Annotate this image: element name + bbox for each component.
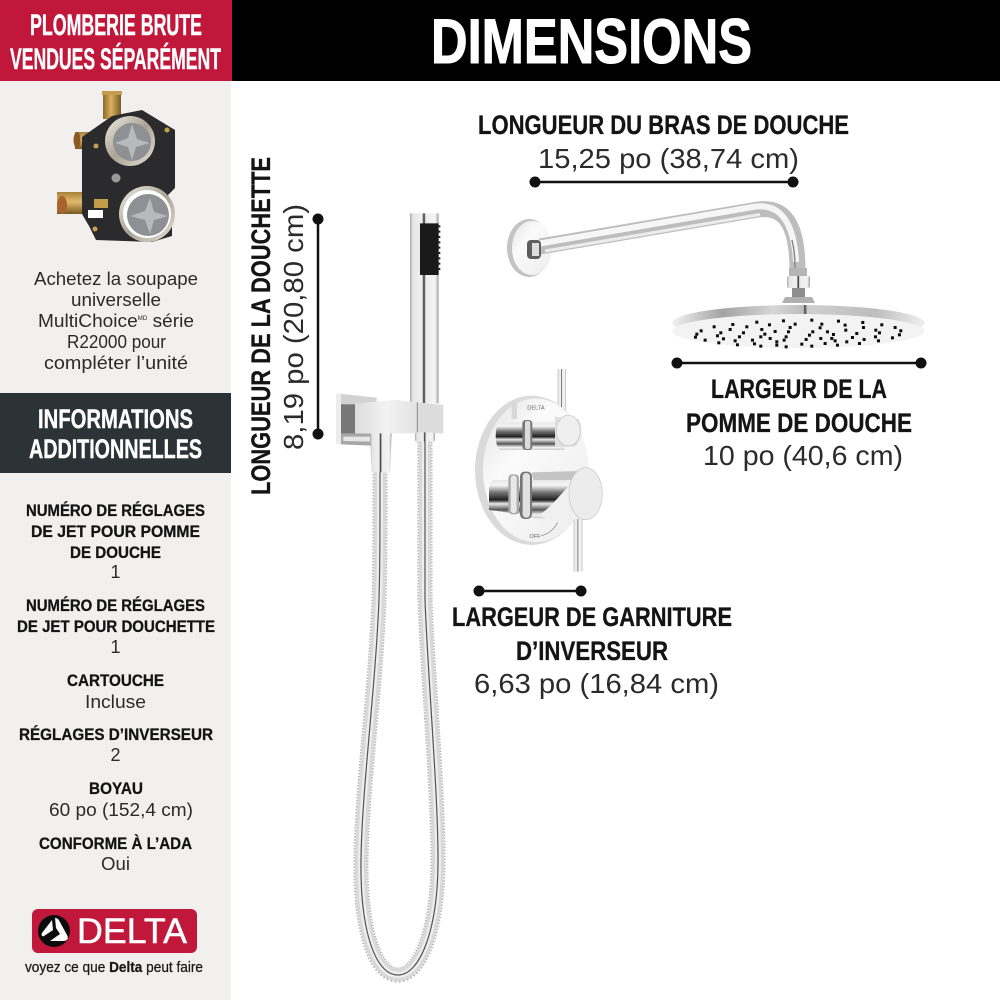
spec: diverter settings: 2 xyxy=(110,745,121,765)
spec: hand shower settings: 1 xyxy=(110,637,121,657)
valve purchase text: MultiChoice xyxy=(38,310,135,331)
shower arm and rain head xyxy=(507,206,925,348)
spec: diverter settings: RÉGLAGES D’INVERSEUR xyxy=(19,725,213,744)
spec: cartridge: CARTOUCHE xyxy=(67,671,164,690)
valve purchase text: série xyxy=(147,310,194,331)
dimension: shower head width label: POMME DE DOUCHE xyxy=(686,408,912,438)
spec: hand shower settings: NUMÉRO DE RÉGLAGES xyxy=(26,596,205,615)
left sidebar panel xyxy=(0,0,231,1000)
header: dimensions title: DIMENSIONS xyxy=(431,7,752,77)
dimension: diverter trim label: 6,63 po (16,84 cm) xyxy=(474,668,719,699)
header: dimensions title xyxy=(232,0,1000,81)
dimension: shower head width label: LARGEUR DE LA xyxy=(711,374,887,404)
valve purchase text: compléter l’unité xyxy=(44,352,188,373)
dimension: shower arm length label xyxy=(478,110,849,174)
valve purchase text: R22000 pour xyxy=(67,331,166,352)
spec: hose: 60 po (152,4 cm) xyxy=(49,799,193,820)
rough-in valve photo xyxy=(57,91,175,242)
hand shower and wall bracket xyxy=(336,213,443,472)
dimension: shower arm length label: 15,25 po (38,74 cm) xyxy=(538,143,799,174)
diverter trim xyxy=(475,369,602,572)
diverter trim: OFF xyxy=(529,534,541,540)
spec: hose xyxy=(49,779,193,820)
additional information heading: ADDITIONNELLES xyxy=(29,434,202,464)
Delta logo: DELTA xyxy=(77,912,188,951)
spec: shower head settings: DE JET POUR POMME xyxy=(31,522,200,541)
spec: shower head settings: NUMÉRO DE RÉGLAGES xyxy=(26,501,205,520)
hose xyxy=(361,440,438,975)
Delta logo xyxy=(25,909,203,976)
dimension: shower head width label xyxy=(686,374,912,471)
spec: hand shower settings xyxy=(17,596,215,657)
dimension: shower head width label: 10 po (40,6 cm) xyxy=(703,440,903,471)
Delta logo: voyez ce que Delta peut faire xyxy=(25,960,203,976)
spec: ADA compliance: Oui xyxy=(101,853,130,874)
spec: ADA compliance: CONFORME À L’ADA xyxy=(39,834,192,853)
spec: cartridge xyxy=(67,671,164,712)
dimension: hand shower label: LONGUEUR DE LA DOUCHETTE xyxy=(246,157,276,495)
header: rough plumbing banner: VENDUES SÉPARÉMENT xyxy=(10,42,221,76)
dimension: hand shower label xyxy=(246,157,309,495)
dimension: diverter trim label: LARGEUR DE GARNITURE xyxy=(452,602,732,632)
valve purchase text: Achetez la soupape xyxy=(34,268,198,289)
additional information heading xyxy=(0,393,231,473)
spec: shower head settings xyxy=(26,501,205,582)
dimension line: hand shower xyxy=(312,214,324,440)
diverter trim: DELTA xyxy=(527,406,545,412)
valve purchase text: MD xyxy=(138,316,148,322)
header: rough plumbing banner xyxy=(0,0,232,81)
dimension line: shower arm xyxy=(530,176,798,188)
dimension: diverter trim label: D’INVERSEUR xyxy=(516,636,668,666)
dimension: hand shower label: 8,19 po (20,80 cm) xyxy=(278,204,309,450)
dimension line: diverter trim width xyxy=(474,586,586,596)
spec: hose: BOYAU xyxy=(89,779,143,798)
spec: shower head settings: 1 xyxy=(110,562,121,582)
dimension: diverter trim label xyxy=(452,602,732,699)
dimension line: shower head width xyxy=(672,358,926,368)
valve purchase text xyxy=(34,268,198,373)
spec: shower head settings: DE DOUCHE xyxy=(70,543,161,562)
spec: cartridge: Incluse xyxy=(85,691,146,712)
spec: diverter settings xyxy=(19,725,213,765)
additional information heading: INFORMATIONS xyxy=(38,404,193,434)
spec: ADA compliance xyxy=(39,834,192,874)
valve purchase text: universelle xyxy=(71,289,161,310)
spec: hand shower settings: DE JET POUR DOUCHETTE xyxy=(17,617,215,636)
header: rough plumbing banner: PLOMBERIE BRUTE xyxy=(30,9,202,42)
dimension: shower arm length label: LONGUEUR DU BRAS DE DOUCHE xyxy=(478,110,849,140)
